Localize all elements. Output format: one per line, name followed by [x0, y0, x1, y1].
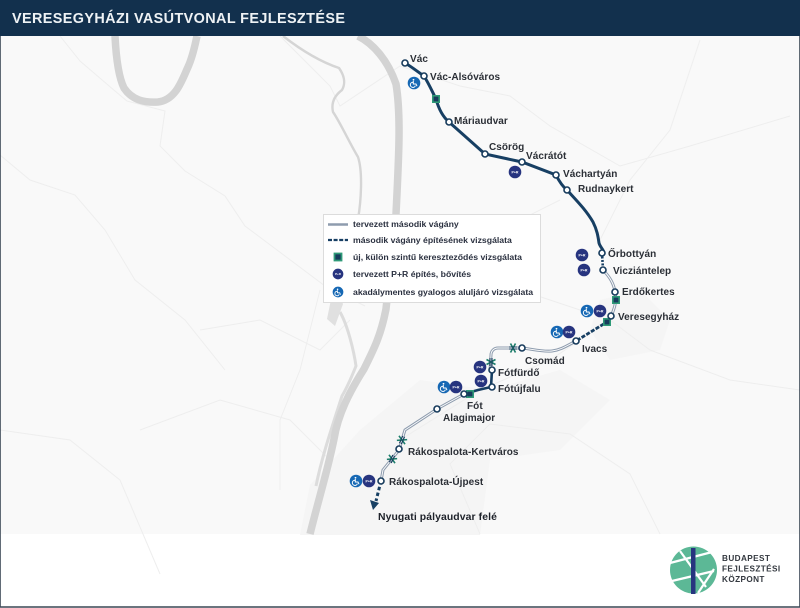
river: Danube main [115, 36, 197, 102]
station labels [378, 54, 679, 523]
station labels: Őrbottyán [608, 247, 656, 260]
logo text: BUDAPEST [722, 554, 770, 563]
arrow: towards Nyugati [370, 500, 379, 510]
station labels: Máriaudvar [454, 116, 508, 127]
logo text: FEJLESZTÉSI [722, 564, 781, 574]
station labels: Fótújfalu [498, 384, 541, 395]
legend: planned second track: tervezett második vágány [353, 219, 459, 229]
planned second track [381, 270, 616, 481]
legend: second track survey: második vágány építésének vizsgálata [353, 235, 512, 245]
dashed line to terminus [376, 481, 381, 501]
station labels: Váchartyán [563, 169, 617, 180]
logo mark [670, 546, 717, 594]
header bar [0, 0, 800, 36]
station labels: Csomád [525, 356, 565, 367]
station labels: Vác [410, 54, 428, 65]
logo [670, 546, 781, 594]
legend: accessibility: akadálymentes gyalogos aluljáró vizsgálata [353, 287, 533, 297]
station labels: Rudnaykert [578, 184, 634, 195]
station labels: Vácrátót [526, 151, 567, 162]
station labels: Rákospalota-Kertváros [408, 447, 519, 458]
stations [378, 60, 618, 484]
legend: park and ride: tervezett P+R építés, bővítés [353, 269, 471, 279]
station labels: Vicziántelep [613, 266, 671, 277]
service icons [350, 77, 606, 487]
station labels: Alagimajor [443, 413, 495, 424]
station labels: Csörög [489, 142, 524, 153]
legend [324, 214, 540, 302]
station labels: Fótfürdő [498, 368, 540, 379]
legend: grade separation: új, külön szintű kereszteződés vizsgálata [353, 252, 522, 262]
station labels: Veresegyház [618, 312, 679, 323]
station labels: Ivacs [582, 344, 608, 355]
river: Danube branch [283, 36, 361, 219]
existing single track, north [405, 63, 604, 253]
station labels: Fót [467, 401, 483, 412]
logo text: KÖZPONT [722, 574, 765, 584]
island hint [327, 285, 343, 326]
station labels: Vác-Alsóváros [430, 72, 501, 83]
title: VERESEGYHÁZI VASÚTVONAL FEJLESZTÉSE [12, 9, 345, 27]
station labels: Rákospalota-Újpest [389, 475, 484, 488]
station labels: Nyugati pályaudvar felé [378, 512, 497, 523]
second track survey dashes [602, 253, 603, 270]
logo text [722, 554, 781, 584]
settlement shading [300, 290, 670, 535]
railway line [376, 63, 616, 501]
grade separations [386, 95, 620, 465]
station labels: Erdőkertes [622, 287, 675, 298]
